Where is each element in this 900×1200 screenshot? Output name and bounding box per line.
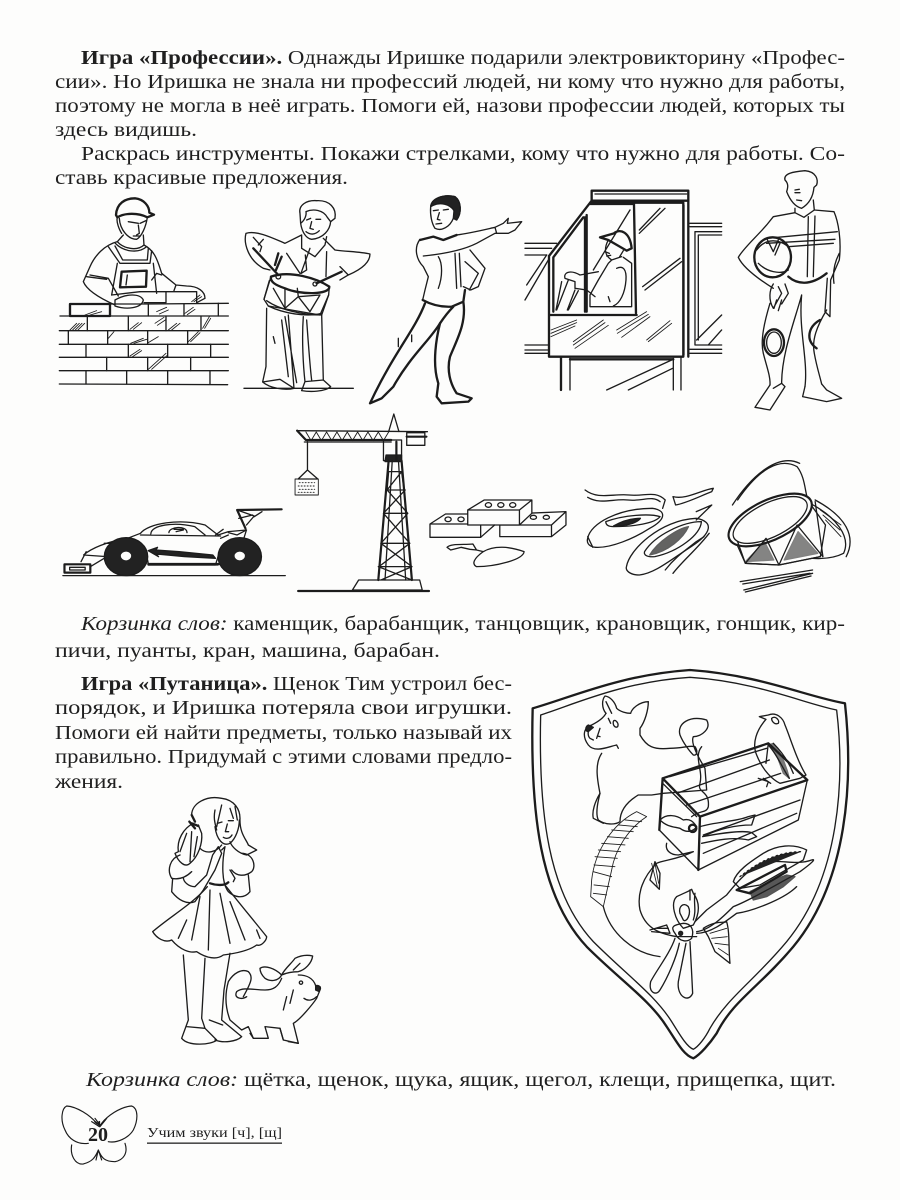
- illustration: girl and puppy: [153, 798, 320, 1044]
- dog: [584, 696, 708, 824]
- text block: game Mix-up instructions: жения.: [54, 771, 123, 793]
- illustration: bricklayer: [59, 198, 228, 385]
- text block: game Professions instructions: Раскрась инструменты. Покажи стрелками, кому что нужно для работы. Со-: [81, 143, 845, 165]
- goldfinch: [755, 714, 806, 787]
- icon: butterfly: [62, 1106, 137, 1164]
- illustration: drum with sticks: [714, 461, 850, 592]
- illustration: racing driver: [738, 171, 842, 410]
- text block: game Professions instructions: поэтому не могла в неё играть. Помоги ей, назови профессии людей, которых ты: [55, 95, 845, 117]
- illustration: bricks and trowel: [430, 500, 566, 567]
- text block: game Mix-up instructions: [54, 673, 512, 793]
- illustration: drummer: [244, 201, 370, 391]
- illustration: tower crane: [295, 414, 429, 591]
- page number butterfly: [62, 1106, 282, 1164]
- pike: [591, 812, 730, 963]
- text block: word basket 1: [55, 613, 845, 662]
- text block: word basket 2: Корзинка слов: щётка, щенок, щука, ящик, щегол, клещи, прищепка, щит.: [85, 1069, 836, 1091]
- text block: game Mix-up instructions: правильно. Придумай с этими словами предло-: [55, 746, 512, 768]
- illustration: ballet dancer: [370, 196, 522, 403]
- illustration: crane operator in cabin: [525, 191, 722, 390]
- illustration: race car: [63, 509, 285, 576]
- text block: game Professions instructions: ставь красивые предложения.: [55, 167, 348, 189]
- text block: word basket 1: Корзинка слов: каменщик, барабанщик, танцовщик, крановщик, гонщик, кир-: [80, 613, 845, 635]
- text block: word basket 1: пичи, пуанты, кран, машина, барабан.: [55, 640, 440, 662]
- shield outline: [532, 670, 848, 1058]
- illustration: pointe shoes: [585, 488, 713, 575]
- text block: game Professions instructions: сии». Но Иришка не знала ни профессий людей, ни кому что нужно для работы,: [55, 71, 845, 93]
- text block: game Professions instructions: Игра «Профессии». Однажды Иришке подарили электровикторину «Профес-: [81, 47, 845, 69]
- text block: game Mix-up instructions: порядок, и Иришка потеряла свои игрушки.: [55, 697, 512, 719]
- brush: [695, 846, 814, 933]
- box: [659, 743, 807, 870]
- pliers: [650, 889, 698, 998]
- text block: game Professions instructions: [55, 47, 845, 189]
- text block: game Mix-up instructions: Помоги ей найти предметы, только называй их: [55, 722, 512, 744]
- illustration: shield with hidden objects: [532, 670, 848, 1058]
- text block: game Mix-up instructions: Игра «Путаница». Щенок Тим устроил бес-: [81, 673, 512, 695]
- page number: 20: [88, 1124, 108, 1146]
- text block: game Professions instructions: здесь видишь.: [55, 119, 197, 141]
- footer label: Учим звуки [ч], [щ]: [147, 1126, 282, 1141]
